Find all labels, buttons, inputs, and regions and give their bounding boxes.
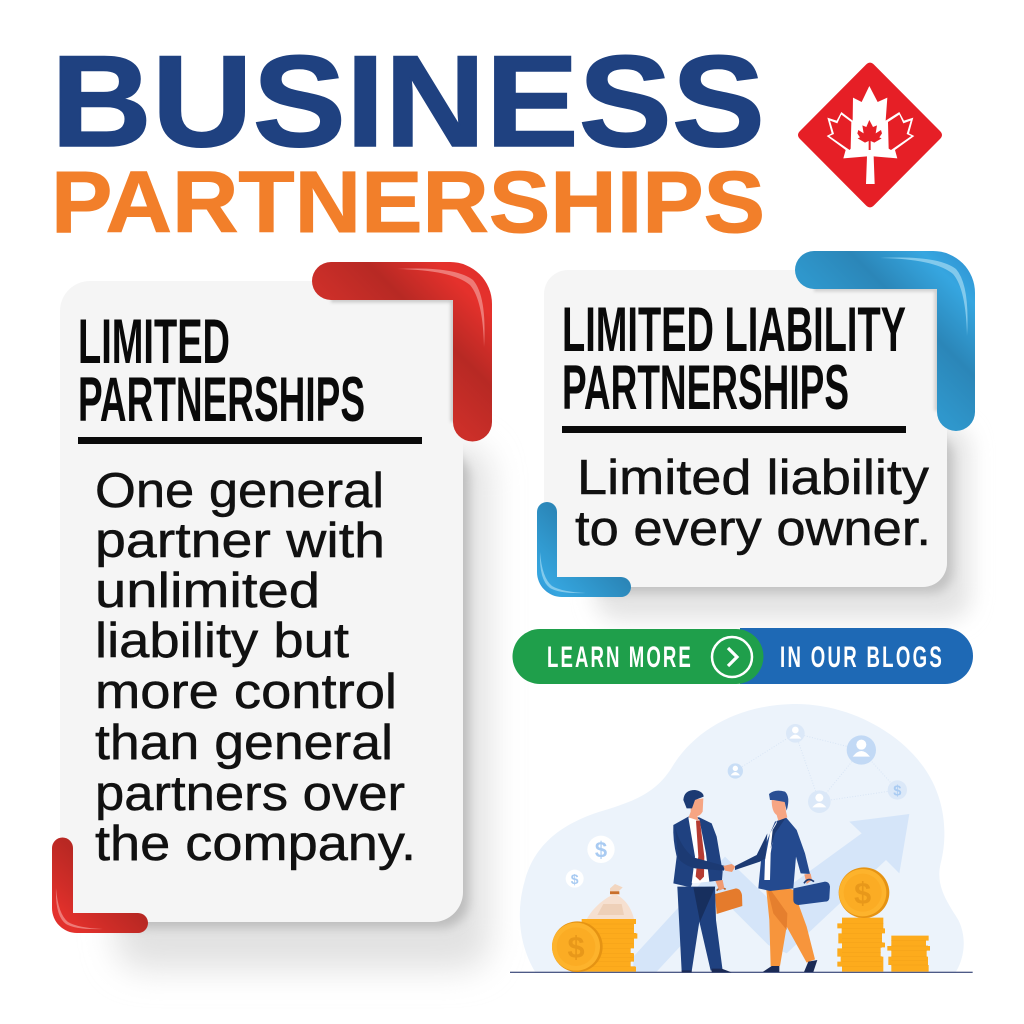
man right: jacket [758,817,810,891]
card shadow: limited partnerships [100,445,490,970]
body text: limited partnerships: the company. [95,817,416,871]
gold coins [552,867,889,972]
heading: limited liability partnerships [562,295,906,423]
body text: limited partnerships: partners over [95,767,405,821]
button: learn more in our blogs [512,628,973,684]
title: partnerships: PARTNERSHIPS [51,154,765,251]
body text: limited partnerships: than general [95,716,393,770]
man left: head [683,790,704,821]
body text: limited liability partnerships: Limited liability [577,451,930,505]
body text: limited partnerships [95,464,416,871]
heading: limited partnerships: PARTNERSHIPS [78,365,365,435]
man left: shoes [682,969,732,972]
man left: jacket [673,817,723,887]
dollar nodes: $ [571,871,579,887]
man left: hand on briefcase [715,880,724,891]
man left: sleeve [675,827,725,871]
body text: limited partnerships: more control [95,665,397,719]
man left: trousers [677,887,723,971]
ground line [510,972,973,973]
briefcase: orange [715,888,742,914]
panel: limited liability partnerships [537,251,975,620]
network person nodes [728,724,876,813]
body text: limited partnerships: partner with [95,514,385,568]
corner bracket: blue bottom left [537,502,631,597]
dollar nodes: $ [595,837,607,862]
man right: shirt [764,820,777,880]
heading: limited partnerships [78,307,365,435]
corner bracket: red top right [312,262,492,442]
title: business: BUSINESS [51,28,765,174]
button label: learn more: LEARN MORE [547,641,691,674]
man left: tie [696,821,704,881]
dollar nodes: $ [893,783,901,799]
background elements [510,704,973,973]
man right: sleeve [735,833,767,870]
handshake hands [723,864,735,872]
man left: shirt [688,817,709,883]
icon: circled arrow [712,637,752,677]
gold coins: $ [854,876,871,910]
man right: shoes [763,960,817,972]
illustration: business handshake [510,704,973,973]
man right: head [769,791,788,821]
handshake figures [673,790,830,972]
coin stacks [582,918,930,972]
divider: limited partnerships [78,437,422,444]
divider: limited liability partnerships [562,426,906,433]
body text: limited partnerships: One general [95,464,384,518]
corner bracket shadow: red top right [331,300,453,422]
gold coins: $ [567,930,585,964]
growth arrow [633,814,909,972]
body text: limited liability partnerships [575,451,931,556]
corner bracket shadow: blue top right [814,289,937,411]
network links [735,733,897,802]
card body: limited liability partnerships [544,270,947,587]
body text: limited partnerships: unlimited [95,564,320,618]
icon: canadian maple leaf diamond logo [798,63,942,207]
body text: limited liability partnerships: to every owner. [575,502,931,556]
button segment: green [512,629,764,684]
man right: hand on briefcase [804,874,812,884]
corner bracket: blue top right [795,251,975,431]
card shadow: limited liability partnerships [585,425,970,620]
briefcase: navy [793,880,830,905]
heading: limited partnerships: LIMITED [78,307,230,377]
man right: lapel [771,817,786,848]
button segment: blue [740,628,973,684]
panel: limited partnerships [52,262,492,970]
money bag [587,884,634,919]
dollar nodes [566,780,907,888]
body text: limited partnerships: liability but [95,614,349,668]
card body: limited partnerships [60,281,463,922]
button label: in our blogs: IN OUR BLOGS [780,641,942,674]
background blob [520,704,964,972]
man right: trousers [765,880,815,966]
corner bracket: red bottom left [52,838,148,933]
